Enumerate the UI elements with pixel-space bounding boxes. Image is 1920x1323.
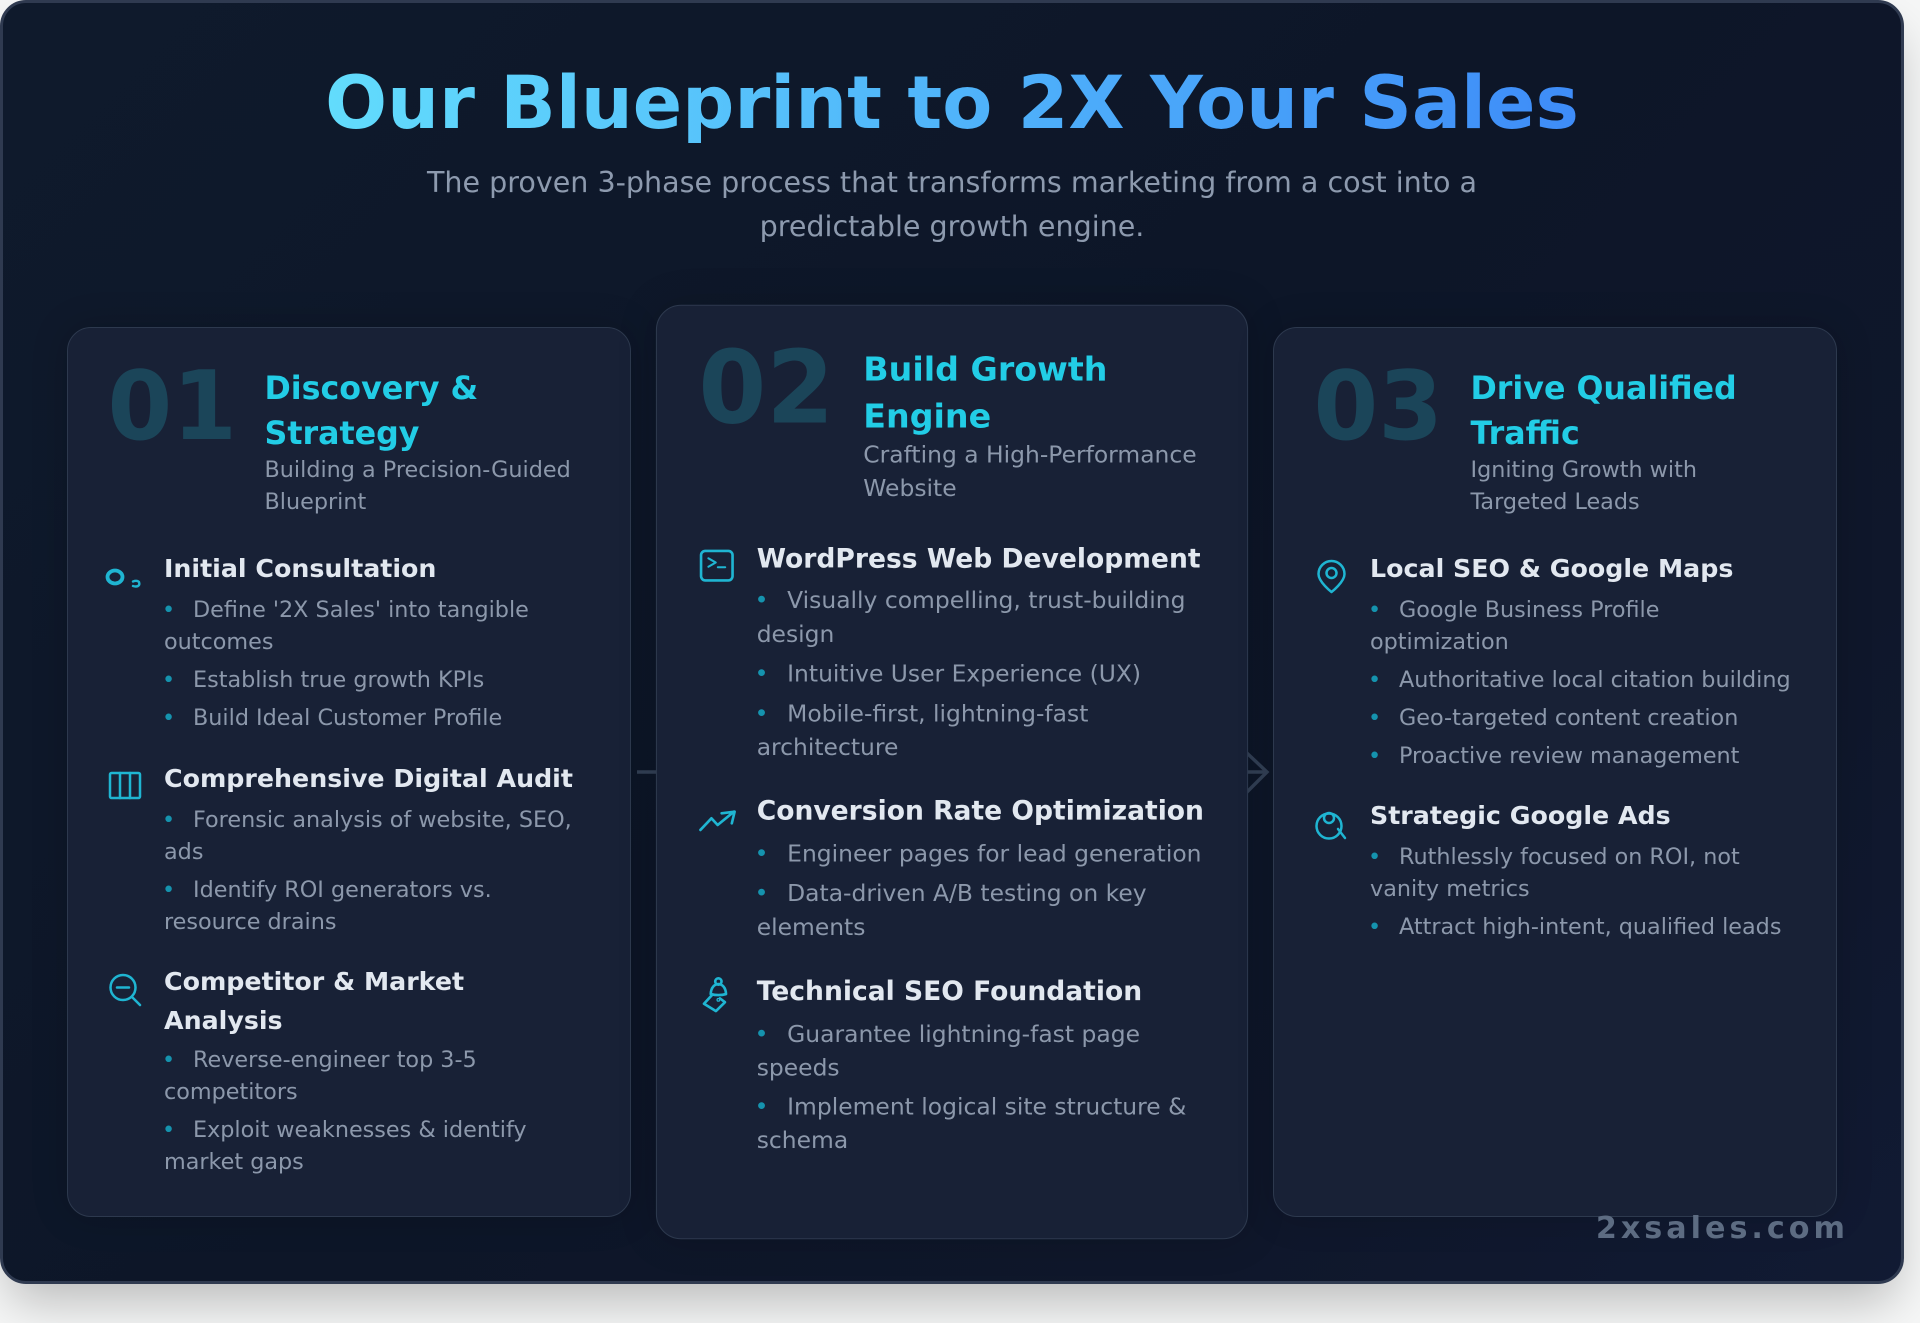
phase 01 heading: Blueprint bbox=[264, 489, 366, 515]
phase 02 heading: Website bbox=[863, 475, 956, 502]
text: strategic google ads: vanity metrics bbox=[1370, 876, 1530, 902]
text: competitor and market analysis: Exploit weaknesses & identify bbox=[193, 1117, 527, 1143]
text: comprehensive digital audit: resource drains bbox=[164, 909, 336, 935]
panel: phase 02 build growth engine bbox=[656, 305, 1248, 1239]
text: initial consultation: Define '2X Sales' into tangible bbox=[193, 597, 529, 623]
icon: columns bbox=[108, 772, 142, 800]
panel: phase 01 discovery and strategy bbox=[67, 327, 631, 1217]
text: local seo and google maps: Geo-targeted content creation bbox=[1399, 705, 1738, 731]
text: wordpress web development: Intuitive User Experience (UX) bbox=[787, 661, 1141, 688]
phase 02 heading: Engine bbox=[863, 398, 991, 436]
phase 01 heading: Discovery & bbox=[264, 371, 478, 407]
text: local seo and google maps: Proactive review management bbox=[1399, 743, 1739, 769]
icon: target search bbox=[1315, 812, 1346, 840]
text: comprehensive digital audit: Forensic analysis of website, SEO, bbox=[193, 807, 572, 833]
item: technical seo foundation bbox=[702, 976, 1186, 1155]
text: competitor and market analysis: competitors bbox=[164, 1079, 298, 1105]
phase 03 header bbox=[1314, 350, 1737, 515]
text: comprehensive digital audit bbox=[164, 764, 573, 935]
text: local seo and google maps bbox=[1370, 554, 1791, 769]
item: strategic google ads bbox=[1315, 801, 1781, 940]
phase 03 heading: Igniting Growth with bbox=[1470, 457, 1697, 483]
text: technical seo foundation: Implement logical site structure & bbox=[787, 1094, 1186, 1121]
item: comprehensive digital audit bbox=[108, 764, 573, 935]
text: comprehensive digital audit: Identify ROI generators vs. bbox=[193, 877, 492, 903]
text: initial consultation: Initial Consultation bbox=[164, 554, 436, 583]
text: comprehensive digital audit: Comprehensive Digital Audit bbox=[164, 764, 573, 793]
text: wordpress web development: Mobile-first, lightning-fast bbox=[787, 701, 1088, 728]
text: competitor and market analysis: market gaps bbox=[164, 1149, 304, 1175]
icon: terminal bbox=[700, 550, 734, 582]
phase 02 heading: Crafting a High-Performance bbox=[863, 441, 1196, 469]
text: strategic google ads bbox=[1370, 801, 1781, 940]
phase 01 heading: Building a Precision-Guided bbox=[264, 457, 571, 483]
text: wordpress web development: architecture bbox=[756, 734, 898, 762]
item: wordpress web development bbox=[700, 543, 1200, 762]
watermark: 2xsales.com bbox=[1596, 1210, 1849, 1246]
icon: bell and diamond bbox=[702, 977, 728, 1012]
text: competitor and market analysis: Competitor & Market bbox=[164, 967, 464, 996]
phase 03 heading: Targeted Leads bbox=[1470, 489, 1640, 515]
text: technical seo foundation: speeds bbox=[756, 1054, 839, 1081]
text: local seo and google maps: Google Business Profile bbox=[1399, 597, 1659, 623]
text: initial consultation: Establish true growth KPIs bbox=[193, 667, 484, 693]
phase 03 heading: Drive Qualified bbox=[1470, 371, 1737, 407]
icon: magnifier minus bbox=[109, 974, 142, 1006]
phase 01 header bbox=[108, 350, 571, 515]
subtitle: predictable growth engine. bbox=[760, 209, 1144, 243]
icon: consultation bbox=[106, 568, 140, 588]
title: Our Blueprint to 2X Your Sales bbox=[325, 60, 1579, 146]
item: conversion rate optimization bbox=[699, 795, 1204, 941]
text: conversion rate optimization: Conversion Rate Optimization bbox=[756, 795, 1204, 826]
text: strategic google ads: Strategic Google Ads bbox=[1370, 801, 1671, 830]
subtitle bbox=[426, 165, 1477, 243]
item: initial consultation bbox=[106, 554, 529, 731]
text: conversion rate optimization: Data-driven A/B testing on key bbox=[787, 880, 1146, 908]
phase 02 header bbox=[698, 329, 1196, 502]
phase number 02: 02 bbox=[698, 329, 834, 446]
text: technical seo foundation: schema bbox=[756, 1127, 848, 1155]
item: local seo and google maps bbox=[1317, 554, 1791, 769]
text: strategic google ads: Attract high-intent, qualified leads bbox=[1399, 914, 1781, 940]
phase 01 heading: Strategy bbox=[264, 416, 419, 452]
text: conversion rate optimization: elements bbox=[756, 914, 865, 941]
text: technical seo foundation bbox=[756, 976, 1186, 1155]
text: competitor and market analysis bbox=[164, 967, 527, 1175]
phase 02 heading bbox=[863, 351, 1196, 502]
phase number 03: 03 bbox=[1314, 350, 1443, 462]
text: wordpress web development bbox=[756, 543, 1200, 762]
phase number 01: 01 bbox=[108, 350, 237, 462]
icon: trending up bbox=[699, 810, 736, 832]
text: technical seo foundation: Technical SEO Foundation bbox=[756, 976, 1142, 1006]
text: initial consultation bbox=[164, 554, 529, 731]
text: wordpress web development: WordPress Web Development bbox=[756, 543, 1200, 574]
text: local seo and google maps: optimization bbox=[1370, 629, 1509, 655]
text: technical seo foundation: Guarantee lightning-fast page bbox=[787, 1020, 1140, 1048]
text: initial consultation: Build Ideal Customer Profile bbox=[193, 705, 502, 731]
text: conversion rate optimization: Engineer pages for lead generation bbox=[787, 841, 1201, 868]
phase 03 heading: Traffic bbox=[1470, 416, 1580, 452]
text: competitor and market analysis: Analysis bbox=[164, 1006, 283, 1035]
text: conversion rate optimization bbox=[756, 795, 1204, 941]
text: local seo and google maps: Local SEO & Google Maps bbox=[1370, 554, 1733, 583]
panel: phase 03 drive qualified traffic bbox=[1273, 327, 1837, 1217]
text: strategic google ads: Ruthlessly focused on ROI, not bbox=[1399, 844, 1740, 870]
text: comprehensive digital audit: ads bbox=[164, 839, 203, 865]
text: wordpress web development: design bbox=[756, 621, 834, 649]
text: local seo and google maps: Authoritative local citation building bbox=[1399, 667, 1791, 693]
subtitle: The proven 3-phase process that transforms marketing from a cost into a bbox=[427, 165, 1477, 199]
item: competitor and market analysis bbox=[109, 967, 527, 1175]
icon: map pin bbox=[1317, 560, 1346, 594]
phase 03 heading bbox=[1470, 371, 1737, 515]
text: initial consultation: outcomes bbox=[164, 629, 273, 655]
text: competitor and market analysis: Reverse-engineer top 3-5 bbox=[193, 1047, 477, 1073]
phase 02 heading: Build Growth bbox=[863, 351, 1107, 389]
phase 01 heading bbox=[264, 371, 571, 515]
text: wordpress web development: Visually compelling, trust-building bbox=[787, 588, 1185, 615]
